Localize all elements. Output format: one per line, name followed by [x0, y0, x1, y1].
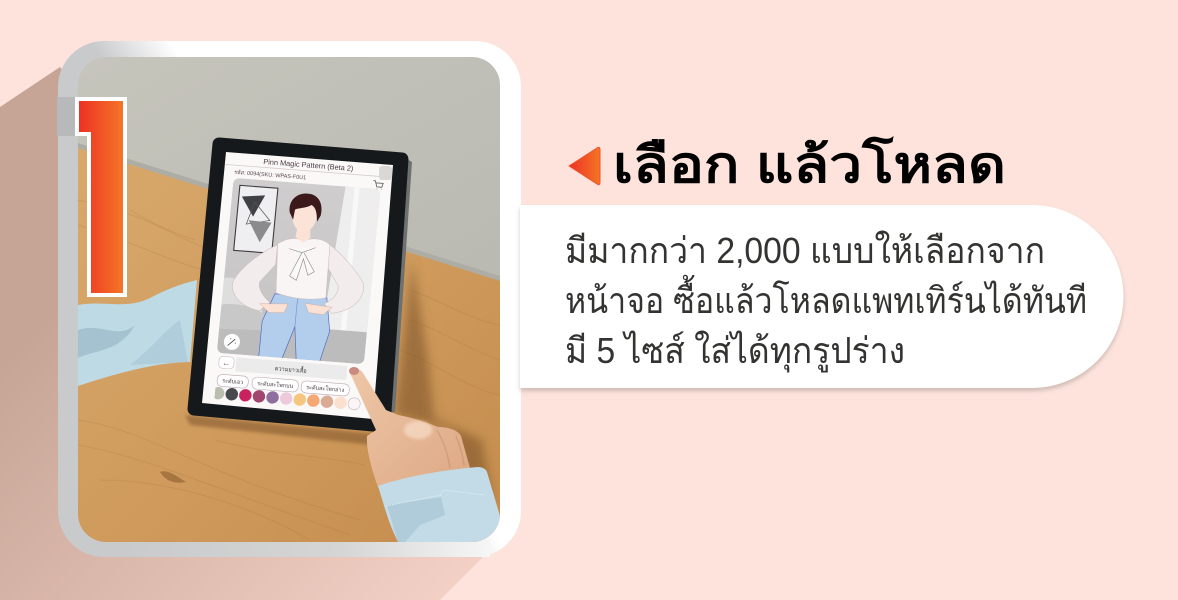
- left sleeve: [78, 280, 197, 386]
- hand highlights: [404, 421, 432, 439]
- sofa: [222, 278, 262, 313]
- photo frame lower edge: [120, 540, 490, 557]
- tablet grey case edge: [392, 160, 412, 412]
- hair: [290, 194, 322, 222]
- tablet and hand shadow on table: [395, 260, 492, 500]
- back button: ←: [222, 358, 231, 368]
- screen title: Pinn Magic Pattern (Beta 2): [263, 157, 354, 173]
- option pills: [217, 374, 350, 396]
- wood grain: [78, 200, 500, 540]
- option pills: ระดับเอว: [222, 377, 243, 386]
- heading: เลือก แล้วโหลด: [613, 135, 1006, 193]
- hands: [260, 303, 332, 315]
- panel: photo frame: [58, 41, 521, 557]
- wooden table: [78, 147, 500, 542]
- option pills: ระดับสะโพกล่าง: [306, 383, 345, 394]
- back button: [218, 356, 235, 369]
- panel: photo of tablet on wooden table: [78, 57, 500, 542]
- wall skirting shadow: [78, 143, 500, 281]
- wood knot: [160, 471, 186, 483]
- framed picture: [234, 185, 278, 253]
- tablet camera bump: [379, 166, 392, 180]
- description line 1: มีมากกว่า 2,000 แบบให้เลือกจาก: [565, 230, 1045, 271]
- long shadow behind photo frame: [0, 67, 483, 600]
- sleeve length label bar: [235, 357, 348, 380]
- heading arrow icon: [569, 147, 600, 185]
- fashion illustration card: [216, 178, 381, 369]
- description line 2: หน้าจอ ซื้อแล้วโหลดแพทเทิร์นได้ทันที: [565, 274, 1087, 321]
- fingernail: [349, 367, 359, 375]
- room background: [217, 178, 381, 364]
- floor: [218, 327, 367, 364]
- colour swatches: [211, 387, 361, 410]
- jeans: [258, 294, 330, 361]
- tablet: [194, 144, 412, 426]
- cuff of shirt: [378, 467, 500, 542]
- wall: [78, 57, 500, 297]
- screen title divider: [224, 164, 379, 177]
- cart icon: [373, 181, 383, 189]
- panel: description pill: [520, 205, 1124, 388]
- number 1: [75, 97, 127, 297]
- tablet screen contents: [214, 159, 384, 410]
- curtain: [327, 186, 380, 332]
- hand: [349, 367, 500, 542]
- description line 3: มี 5 ไซส์ ใส่ได้ทุกรูปร่าง: [565, 330, 905, 373]
- arms: [230, 241, 278, 312]
- tablet black body: [194, 144, 402, 426]
- blouse: [276, 238, 330, 300]
- bow: [289, 247, 316, 281]
- neck and face: [296, 229, 310, 242]
- option pills: ระดับสะโพกบน: [257, 379, 294, 390]
- tablet screen: [202, 152, 393, 419]
- figure: [232, 194, 364, 361]
- gray tab behind number: [57, 97, 78, 136]
- jeans fly: [295, 299, 298, 327]
- product code: รหัส: 0094(SKU: WPAS-F0U1: [234, 169, 306, 181]
- magic wand button: [224, 334, 240, 350]
- description text: [565, 230, 1087, 373]
- sleeve length label bar: ความยาวเสื้อ: [274, 362, 308, 375]
